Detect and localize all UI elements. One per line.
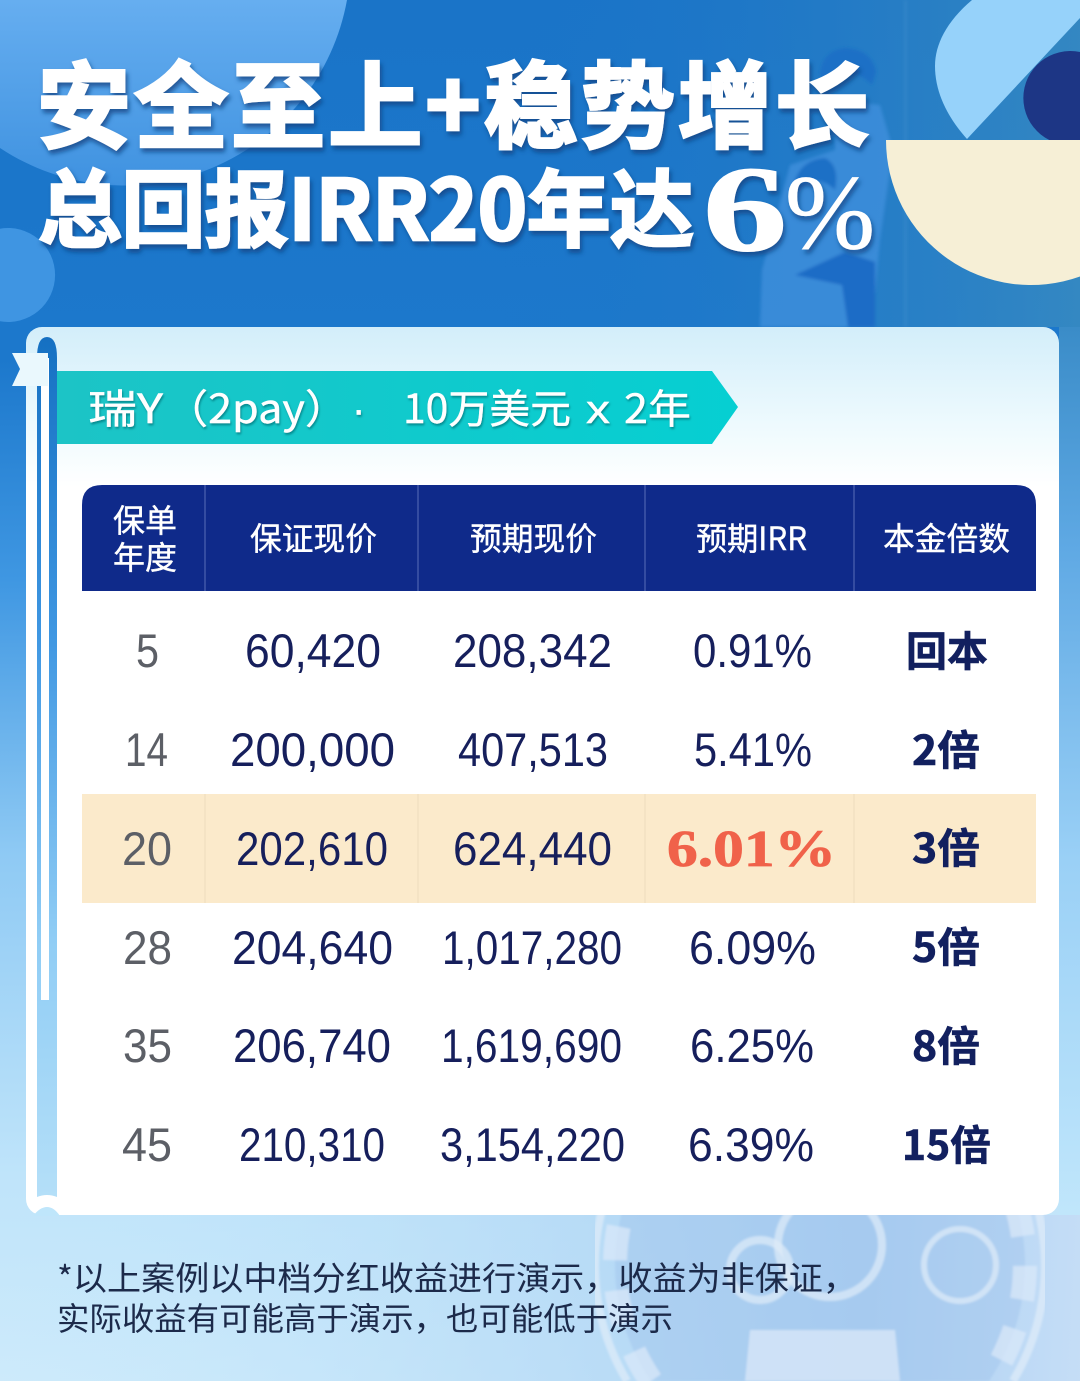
row: year 5: 5 bbox=[136, 624, 159, 677]
panel: table card bbox=[12, 327, 1059, 1216]
table header: 年度 bbox=[113, 533, 177, 579]
banner text: · bbox=[352, 388, 365, 432]
row: year 5: 0.91% bbox=[693, 624, 812, 677]
scroll bottom curl bbox=[26, 1204, 60, 1216]
scroll inner strip bbox=[41, 358, 49, 1000]
banner text: 2年 bbox=[624, 377, 691, 435]
decorative circle: left bbox=[0, 228, 55, 322]
footnote: 实际收益有可能高于演示，也可能低于演示 bbox=[57, 1294, 673, 1340]
banner text: 瑞Y bbox=[88, 377, 164, 435]
scroll rail bbox=[37, 337, 57, 1197]
table header: 保单 bbox=[113, 496, 177, 542]
row: year 20 highlighted: 20 bbox=[122, 822, 172, 875]
scroll flag bbox=[12, 353, 48, 386]
row: year 14: 14 bbox=[125, 723, 168, 776]
row: year 35: 35 bbox=[123, 1019, 172, 1072]
row: year 35 bbox=[123, 1013, 980, 1073]
row: year 20 highlighted: 202,610 bbox=[236, 822, 388, 875]
banner text: x bbox=[586, 388, 610, 432]
row: year 5: 60,420 bbox=[245, 624, 381, 677]
background figure: person silhouette bbox=[760, 0, 906, 327]
table bbox=[82, 485, 1036, 1172]
row: year 28: 5倍 bbox=[912, 914, 980, 974]
footnote: *以上案例以中档分红收益进行演示，收益为非保证， bbox=[57, 1252, 857, 1300]
table header: 保证现价 bbox=[250, 514, 377, 560]
row: year 14: 2倍 bbox=[912, 717, 980, 777]
row: year 28: 6.09% bbox=[689, 921, 816, 974]
row: year 45: 6.39% bbox=[688, 1118, 814, 1171]
row: year 28 bbox=[123, 914, 980, 974]
row: year 20 highlighted: 624,440 bbox=[453, 822, 612, 875]
banner text: （2pay） bbox=[165, 377, 348, 435]
row: year 20 highlighted bbox=[122, 815, 980, 878]
row: year 28: 1,017,280 bbox=[442, 921, 622, 974]
title: 6: 6 bbox=[703, 142, 787, 277]
row: year 14: 407,513 bbox=[458, 723, 608, 776]
table header: 预期现价 bbox=[470, 514, 597, 560]
banner bbox=[57, 371, 738, 444]
title: percent: % bbox=[785, 154, 875, 271]
row: year 45: 15倍 bbox=[902, 1112, 991, 1172]
row: year 35: 6.25% bbox=[690, 1019, 814, 1072]
row: year 45 bbox=[122, 1112, 991, 1172]
table header: 预期IRR bbox=[696, 514, 807, 560]
row: year 5: 回本 bbox=[906, 618, 988, 678]
table header: 本金倍数 bbox=[883, 514, 1010, 560]
decorative shape: light blue leaf bbox=[935, 0, 1080, 139]
row: year 28: 204,640 bbox=[232, 921, 393, 974]
row: year 28: 28 bbox=[123, 921, 172, 974]
row: year 20 highlighted: 6.01% bbox=[667, 821, 836, 878]
title line 2: 总回报IRR20年达 bbox=[38, 144, 694, 265]
table header bbox=[82, 485, 1036, 591]
row: year 45: 45 bbox=[122, 1118, 172, 1171]
row: year 14: 5.41% bbox=[694, 723, 812, 776]
row: year 35: 206,740 bbox=[233, 1019, 391, 1072]
row: year 35: 8倍 bbox=[912, 1013, 980, 1073]
row: year 5: 208,342 bbox=[453, 624, 612, 677]
banner text: 10万美元 bbox=[403, 377, 571, 435]
decorative circle: top left bbox=[0, 0, 347, 185]
title bbox=[37, 32, 875, 277]
highlighted row background bbox=[82, 794, 1036, 903]
row: year 45: 3,154,220 bbox=[440, 1118, 625, 1171]
row: year 14 bbox=[125, 717, 980, 777]
banner text bbox=[88, 377, 691, 435]
row: year 35: 1,619,690 bbox=[441, 1019, 622, 1072]
watch decoration bbox=[595, 1040, 1045, 1381]
decorative circle: navy bbox=[1023, 51, 1080, 145]
row: year 14: 200,000 bbox=[230, 723, 395, 776]
footnote bbox=[57, 1252, 857, 1340]
row: year 5 bbox=[136, 618, 988, 678]
row: year 45: 210,310 bbox=[239, 1118, 385, 1171]
title line 1: 安全至上+稳势增长 bbox=[37, 32, 869, 168]
row: year 20 highlighted: 3倍 bbox=[912, 815, 980, 875]
decorative shape: cream half circle bbox=[886, 140, 1080, 285]
